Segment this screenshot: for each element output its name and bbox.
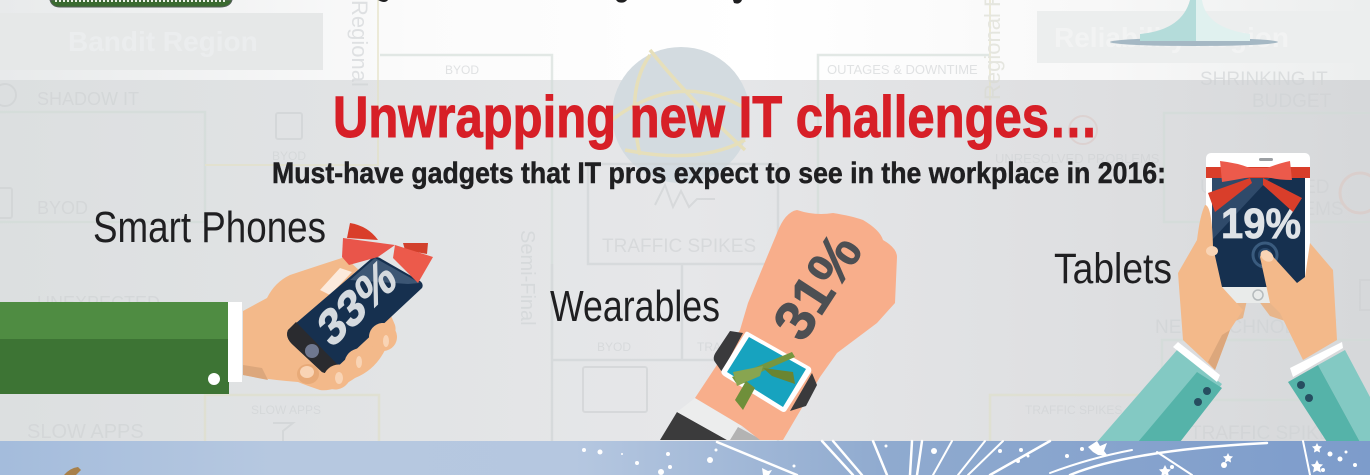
right hand [1260, 243, 1337, 360]
percentage 31%: 31% [760, 222, 874, 351]
green sleeve [0, 302, 242, 394]
ghost tournament bracket background: PROBLEMS [1238, 199, 1344, 220]
ghost label: Reliability Region [1037, 11, 1370, 63]
percentage 33%: 33% [310, 247, 404, 358]
firework streaks [717, 441, 1310, 475]
top-left green banner fragment [50, 0, 232, 7]
left thumbnail [1206, 246, 1218, 256]
forearm and fist [695, 210, 897, 440]
left decorative gold fragment [64, 467, 81, 475]
background panel: top strip [0, 0, 1370, 80]
background panel: grey main area [0, 80, 1370, 441]
ghost tournament bracket background: SHRINKING IT [1200, 69, 1328, 90]
percentage 19%: 19% [1221, 200, 1301, 248]
ghost tournament bracket background: BYOD [597, 340, 631, 354]
ghost label: Reliability Region: Reliability Region [1054, 22, 1289, 53]
illustration: hand holding smartphone, 33% [0, 223, 433, 394]
red bow [1206, 161, 1310, 212]
ghost tournament bracket background: TRAFFIC [697, 340, 748, 354]
left hand [1178, 205, 1243, 370]
ghost tournament bracket background: TRAFFIC SPIKES [602, 236, 756, 257]
fingers [297, 317, 403, 394]
ghost tournament bracket background: BUDGET [1252, 91, 1332, 112]
ghost tournament bracket background: NEW TECHNOLOGY [1155, 317, 1338, 338]
ghost globe [612, 47, 750, 183]
ghost tournament bracket background: TRAFFIC SPIKES [1190, 423, 1344, 444]
firework stars and sparks [582, 441, 1357, 475]
ghost tournament bracket background: UNEXPECTED [37, 293, 160, 313]
ghost tournament bracket background: OUTAGES & DOWNTIME [827, 62, 978, 77]
ghost label: Bandit Region: Bandit Region [68, 26, 258, 57]
suit sleeve [660, 398, 762, 440]
fingers behind tablet [1232, 300, 1288, 322]
smartphone [287, 257, 423, 373]
smartwatch [714, 331, 817, 412]
ghost tournament bracket background: BYOD [37, 198, 88, 218]
ghost tournament bracket background: Semi-Final [516, 230, 538, 326]
label: Wearables: Wearables [550, 282, 720, 331]
ghost tournament bracket background: BYOD [272, 149, 306, 163]
tablet [1206, 153, 1310, 303]
right thumbnail [1258, 248, 1276, 264]
ghost tournament bracket background: SLOW APPS [27, 421, 144, 443]
green ribbon [732, 352, 795, 410]
ghost tournament bracket background: SLOW APPS [251, 403, 321, 417]
ghost tournament bracket background: SHADOW IT [37, 89, 139, 109]
title: Unwrapping new IT challenges… [333, 85, 1098, 150]
ghost tournament bracket background: UNRESOLVED [1200, 177, 1330, 198]
ghost tournament bracket background: BYOD [445, 63, 479, 77]
ghost tournament bracket background: Regional [347, 0, 372, 87]
subtitle: Must-have gadgets that IT pros expect to see in the workplace in 2016: [272, 157, 1166, 190]
ghost tournament bracket background: TRAFFIC SPIKES [1025, 403, 1122, 417]
illustration: wrist with smartwatch, 31% [660, 210, 897, 440]
ghost pedestal icon [1110, 0, 1278, 46]
label: Smart Phones: Smart Phones [93, 203, 326, 252]
ghost tournament bracket background: UNRESOLVED PROBLEMS [995, 151, 1160, 166]
illustration: hands holding tablet, 19% [1097, 153, 1370, 442]
label: Tablets: Tablets [1054, 245, 1172, 293]
left sleeve [1097, 342, 1222, 442]
hand palm [243, 257, 396, 390]
bottom panel: blue fireworks band [0, 441, 1370, 475]
red bow [342, 223, 433, 283]
cropped text descenders at top [378, 0, 742, 4]
right sleeve [1288, 342, 1370, 442]
ghost label: Bandit Region [0, 13, 323, 70]
